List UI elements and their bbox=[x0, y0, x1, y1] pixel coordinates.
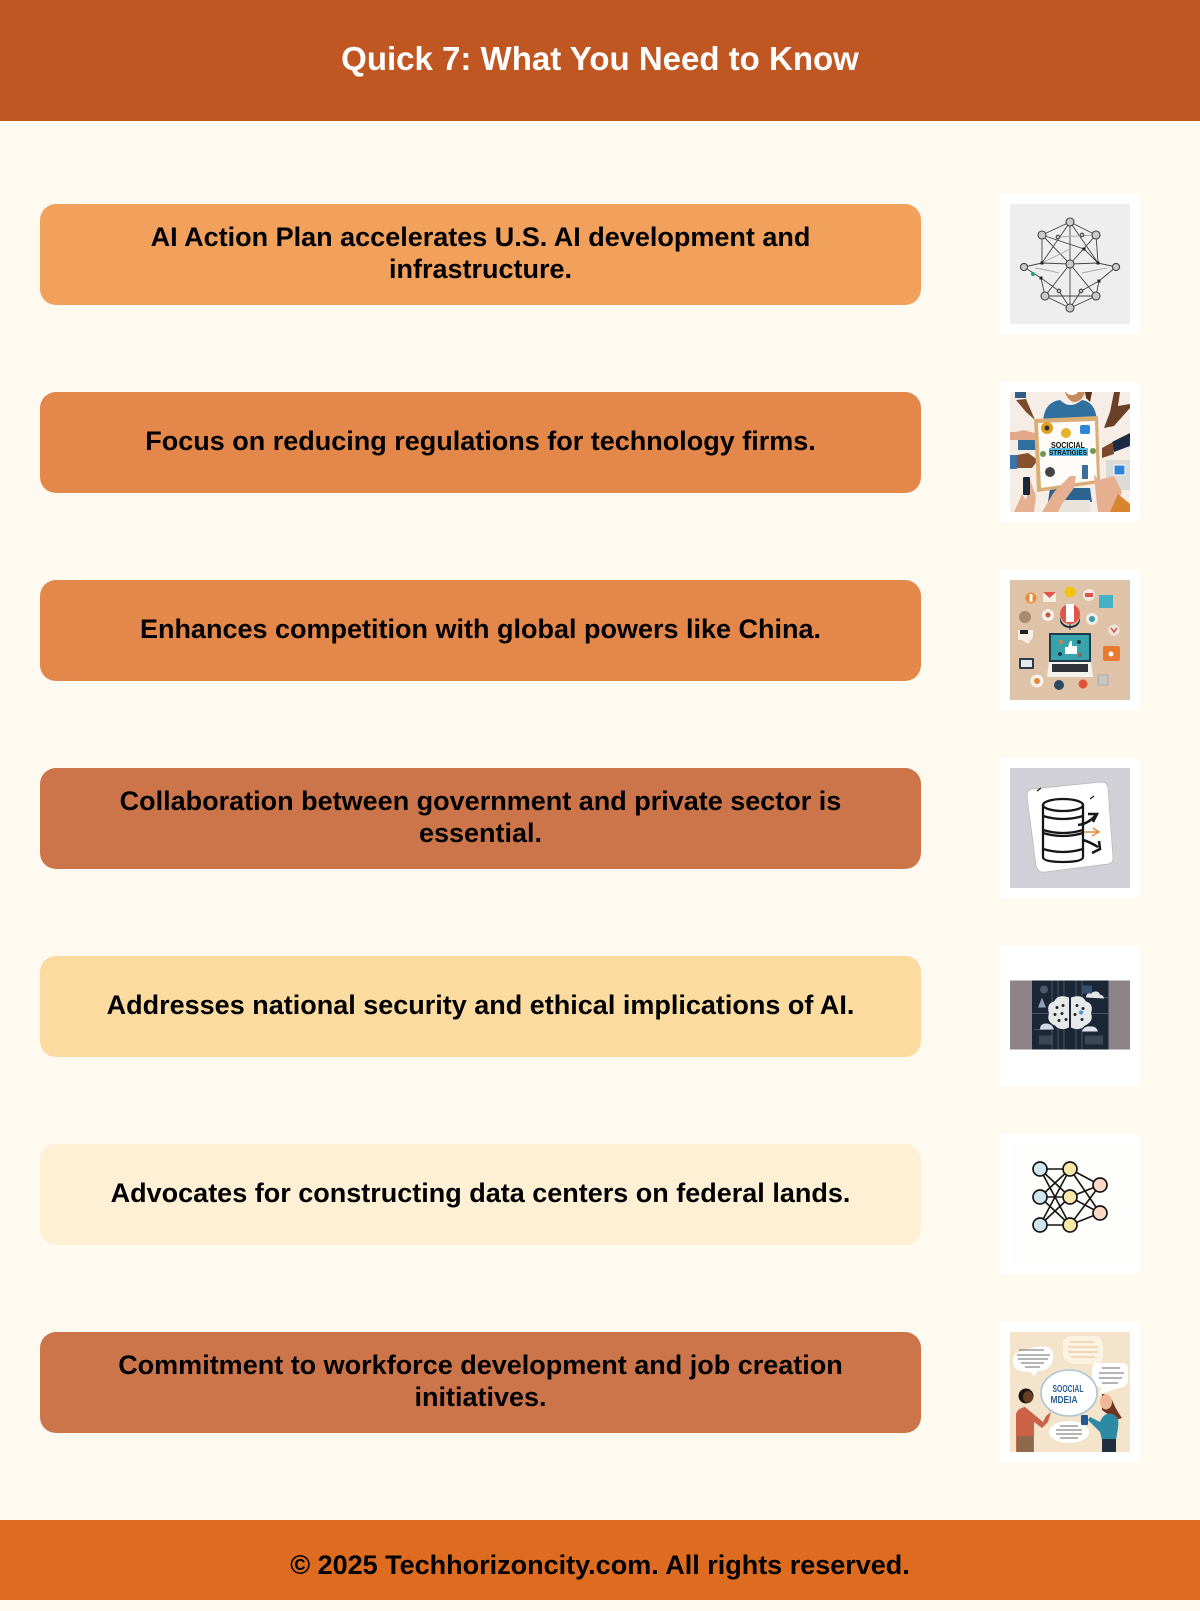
icon: social media conversation: SOOCIAL bbox=[1052, 1384, 1084, 1395]
panel: point 3: Enhances competition with global powers like China. bbox=[140, 614, 821, 644]
panel: point 1: AI Action Plan accelerates U.S. AI development and infrastructure. bbox=[151, 222, 810, 284]
icon: database with arrows bbox=[1000, 758, 1140, 898]
icon: social strategies board bbox=[1000, 382, 1140, 522]
header band bbox=[0, 0, 1200, 121]
footer copyright text: © 2025 Techhorizoncity.com. All rights reserved. bbox=[290, 1550, 910, 1580]
icon: social media conversation bbox=[1000, 1322, 1140, 1462]
panel: point 2 bbox=[40, 392, 921, 493]
icon: AI brain circuit bbox=[1000, 946, 1140, 1086]
icon: neural network bbox=[1000, 1134, 1140, 1274]
footer band bbox=[0, 1520, 1200, 1600]
panel: point 4 bbox=[40, 768, 921, 869]
icon: network diagram bbox=[1000, 194, 1140, 334]
board with headline: SOCICIAL bbox=[1051, 441, 1085, 450]
panel: point 5: Addresses national security and ethical implications of AI. bbox=[107, 990, 854, 1020]
title: Quick 7: What You Need to Know bbox=[341, 40, 859, 77]
panel: point 6 bbox=[40, 1144, 921, 1245]
board with headline bbox=[1034, 416, 1100, 492]
panel: point 5 bbox=[40, 956, 921, 1057]
board with headline: STRATIGIES bbox=[1049, 448, 1087, 457]
panel: point 3 bbox=[40, 580, 921, 681]
icon: laptop with social icons bbox=[1000, 570, 1140, 710]
panel: point 6: Advocates for constructing data centers on federal lands. bbox=[111, 1178, 850, 1208]
icon: social media conversation: MDEIA bbox=[1050, 1395, 1078, 1406]
panel: point 4: Collaboration between government and private sector is essential. bbox=[120, 786, 841, 848]
panel: point 7: Commitment to workforce development and job creation initiatives. bbox=[118, 1350, 843, 1412]
panel: point 2: Focus on reducing regulations for technology firms. bbox=[145, 426, 816, 456]
panel: point 7 bbox=[40, 1332, 921, 1433]
panel: point 1 bbox=[40, 204, 921, 305]
